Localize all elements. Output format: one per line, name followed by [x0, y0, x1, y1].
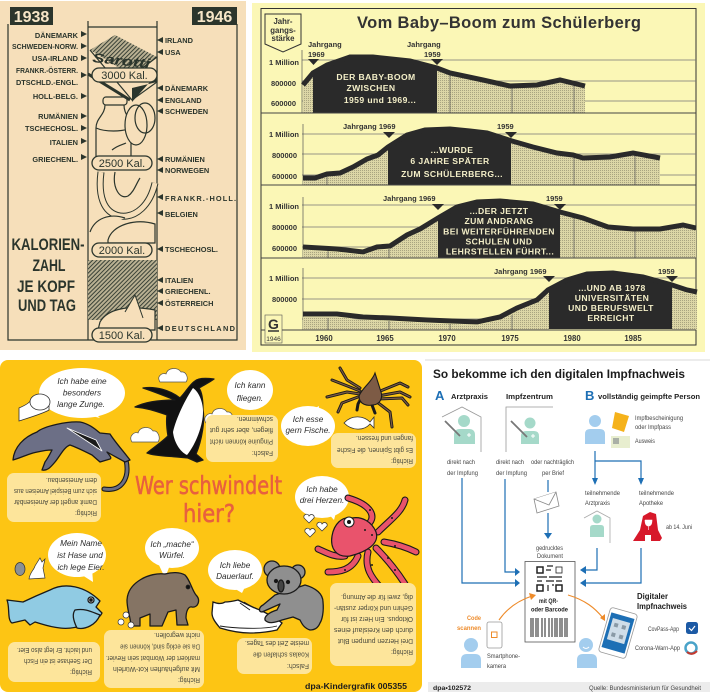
label: printed document: Dokument: [537, 553, 563, 560]
block text: BEI WEITERFÜHRENDEN: [443, 226, 555, 236]
country list 1946: USA: [165, 48, 181, 57]
answer: octopus: Drei Herzen pumpen Blut: [338, 637, 413, 644]
country list 1938: GRIECHENL.: [32, 155, 78, 164]
answer: octopus: Gehirn und Körper zustän-: [333, 604, 413, 611]
answer: anteater: Richtig:: [75, 509, 97, 516]
calorie marker 2500: [92, 156, 152, 170]
speech bubble: anteater: besonders: [63, 388, 101, 398]
answer: koala: Falsch:: [287, 662, 309, 669]
labels under A: direkt nach: [496, 459, 524, 466]
x axis years: 1960: [315, 334, 333, 343]
block text: ZWISCHEN: [346, 83, 396, 93]
marker 1969: Jahrgang 1969: [343, 122, 396, 131]
x axis years: 1970: [438, 334, 456, 343]
axis labels: [269, 130, 299, 181]
marker 1969: Jahrgang 1969: [494, 267, 547, 276]
label: smartphone camera: [487, 653, 520, 670]
marker 1969: Jahrgang 1969: [383, 194, 436, 203]
footer bar: [428, 682, 710, 692]
heading: Kalorienzahl je Kopf und Tag: [12, 235, 84, 315]
speech bubble: penguin: fliegen.: [237, 394, 263, 403]
icon: doctor in practice: [442, 407, 481, 452]
illustration: chocolate box: [88, 35, 157, 102]
logo G 1946: G: [268, 316, 279, 332]
country list 1946: SCHWEDEN: [165, 107, 208, 116]
axis labels: 1 Million: [269, 202, 299, 211]
year label 1946: 1946: [197, 9, 232, 26]
speech bubble: spider: gern Fische.: [285, 426, 331, 435]
answer: wombat: markiert der Wombat sein Revier.: [106, 654, 200, 661]
icon: smartphone: [487, 622, 502, 648]
country list 1946: DÄNEMARK: [165, 84, 209, 93]
country list 1946: DEUTSCHLAND: [165, 324, 236, 333]
marker 1959: 1959: [658, 267, 675, 276]
octopus: [318, 498, 416, 587]
axis labels: 600000: [272, 244, 297, 253]
x axis years: 1980: [563, 334, 581, 343]
icon: hearts: [304, 514, 327, 537]
year label 1938: 1938: [14, 9, 49, 26]
label: printed document: [536, 545, 564, 560]
country list 1946: ITALIEN: [165, 276, 193, 285]
label: scan code: scannen: [457, 625, 481, 632]
heading: Kalorienzahl je Kopf und Tag: KALORIEN-: [12, 235, 84, 254]
labels practice and pharmacy: Apotheke: [639, 500, 663, 507]
panel: Vom Baby-Boom zum Schülerberg: [252, 3, 705, 352]
country list 1946: GRIECHENL.: [165, 287, 211, 296]
illustration: milk bottle, eggs and sausage: [96, 97, 155, 216]
speech bubble: sea hare: Mein Name: [60, 539, 102, 548]
label: smartphone camera: kamera: [487, 663, 506, 670]
country list 1946: BELGIEN: [165, 210, 198, 219]
printed document with QR and bar code: [525, 562, 575, 642]
axis labels: 1 Million: [269, 274, 299, 283]
penguin: [135, 378, 214, 462]
x axis years: 1985: [624, 334, 642, 343]
country list 1938: SCHWEDEN-NORW.: [12, 42, 78, 51]
block text: ZUM SCHÜLERBERG...: [401, 169, 503, 179]
speech bubble: spider: [281, 406, 335, 446]
illustration: potatoes and fish: [88, 260, 157, 330]
speech bubble: anteater: Ich habe eine: [57, 377, 107, 386]
axis labels: 600000: [271, 99, 296, 108]
answer: penguin: schwimmen.: [237, 415, 273, 422]
speech bubble: penguin: [227, 370, 273, 410]
icon: pharmacy A: [633, 512, 662, 541]
calorie marker 3000: 3000 Kal.: [101, 70, 148, 82]
heading: digital certificate: Digitaler: [637, 592, 668, 601]
marker 1959: 1959: [546, 194, 563, 203]
block text: ERREICHT: [587, 313, 635, 323]
illustration: chocolate box: Sarotti: [92, 50, 151, 71]
speech bubble: octopus: drei Herzen.: [300, 496, 344, 505]
x axis years: 1965: [376, 334, 394, 343]
speech bubble: wombat: [145, 528, 199, 578]
fish: sea hare: [7, 586, 102, 628]
marker 1969: [343, 122, 396, 138]
answer: octopus: Oktopus. Ein Herz ist für: [340, 615, 413, 622]
answer: spider: Es gibt Spinnen, die Fische: [337, 446, 413, 453]
label: scan code: [457, 615, 481, 632]
section heading B: [585, 388, 700, 403]
person B: [585, 415, 605, 444]
icon: tape measure: [19, 394, 50, 421]
labels under A: per Brief: [542, 470, 564, 477]
answer: penguin: Falsch:: [252, 449, 273, 456]
heading: Kalorienzahl je Kopf und Tag: JE KOPF: [17, 277, 75, 296]
block text: ...DER JETZT: [470, 206, 529, 216]
section heading A: A: [435, 388, 445, 403]
labels practice and pharmacy: teilnehmende: [639, 490, 674, 497]
labels under A: direkt nach: [447, 459, 475, 466]
title: [135, 471, 282, 528]
title: Wer schwindelt: [135, 471, 282, 500]
axis labels: [269, 202, 299, 253]
heading: digital certificate: Impfnachweis: [637, 602, 688, 611]
answer: sea hare: Richtig:: [70, 668, 92, 675]
axis labels: 1 Million: [269, 58, 299, 67]
speech bubble: koala: Dauerlauf.: [216, 572, 254, 581]
credit: dpa-Kindergrafik 005355: [305, 681, 407, 691]
spider: [327, 368, 410, 427]
marker Jahrgang 1969: 1969: [308, 50, 325, 59]
answer: penguin: [206, 415, 278, 462]
marker Jahrgang 1969: [308, 40, 342, 65]
answer: spider: [331, 433, 416, 468]
answer: koala: Koalas schlafen die: [253, 650, 309, 658]
heading: digital certificate: [637, 592, 688, 611]
QR code: [537, 566, 562, 591]
marker 1969: [383, 194, 444, 210]
axis labels: 800000: [272, 223, 297, 232]
answer: anteater: [7, 473, 101, 522]
block text: ...WURDE: [431, 145, 473, 155]
answer: octopus: durch den Kreislauf eines: [334, 626, 413, 633]
running shoe: [212, 600, 282, 633]
marker Jahrgang 1959: 1959: [424, 50, 441, 59]
speech bubble: sea hare: ist Hase und: [57, 551, 103, 560]
chart row 1: [269, 40, 696, 113]
answer: penguin: fliegen, aber sehr gut: [210, 426, 273, 433]
answer: wombat: Mit aufgehäuften Kot-Würfeln: [113, 665, 200, 672]
answer: sea hare: Der Seehase ist ein Fisch: [24, 657, 92, 664]
bar code: [531, 618, 567, 637]
axis labels: [269, 58, 299, 108]
block text: 6 JAHRE SPÄTER: [410, 156, 490, 166]
country list 1946: NORWEGEN: [165, 166, 209, 175]
axis labels: 600000: [272, 172, 297, 181]
block text: UNIVERSITÄTEN: [575, 293, 649, 303]
country list 1946: ÖSTERREICH: [165, 299, 213, 308]
label: from 14 June: ab 14. Juni: [666, 524, 692, 531]
labels for B documents: [635, 415, 683, 445]
panel: Wer schwindelt hier?: [0, 360, 422, 692]
printed document with QR and bar code: mit QR-: [539, 598, 558, 605]
speech bubble: penguin: Ich kann: [235, 381, 266, 390]
labels under A: der Impfung: [447, 470, 478, 477]
arrows from A to document: [462, 478, 552, 587]
country list 1938: DÄNEMARK: [35, 31, 79, 40]
chart title: Vom Baby–Boom zum Schülerberg: [357, 14, 641, 32]
answer: octopus: Richtig:: [391, 648, 413, 655]
axis labels: 800000: [272, 151, 297, 160]
answer: sea hare: und laicht. Er legt also Eier.: [17, 646, 92, 653]
marker 1959: [658, 267, 678, 282]
label: scan code: Code: [467, 615, 481, 622]
icon: doctor in vaccination centre: [506, 407, 553, 452]
axis unit badge: gangs-: [270, 26, 296, 35]
calorie marker 3000: [92, 68, 157, 82]
country list 1938: HOLL-BELG.: [33, 92, 78, 101]
labels for B documents: Impfbescheinigung: [635, 415, 683, 422]
country list 1938: [12, 31, 87, 164]
block text: [336, 72, 416, 105]
country list 1946: TSCHECHOSL.: [165, 245, 218, 254]
speech bubble: octopus: Ich habe: [306, 485, 338, 494]
answer: spider: fangen und fressen.: [356, 434, 413, 441]
block text: [443, 206, 555, 256]
frame and central column: [8, 21, 237, 340]
block text: UND BERUFSWELT: [568, 303, 654, 313]
arrows to document from the right: [580, 548, 641, 587]
marker Jahrgang 1969: Jahrgang: [308, 40, 342, 49]
axis unit badge: [265, 14, 301, 52]
panel: digitaler Impfnachweis: [425, 359, 710, 693]
labels under A: [447, 459, 574, 477]
chart row 4: [269, 267, 697, 330]
marker Jahrgang 1959: Jahrgang: [407, 40, 441, 49]
calorie marker 2500: 2500 Kal.: [99, 158, 145, 170]
country list 1938: FRANKR.-ÖSTERR.: [16, 66, 78, 75]
answer: sea hare: [8, 642, 100, 682]
axis labels: 800000: [271, 79, 296, 88]
calorie marker 2000: 2000 Kal.: [99, 245, 145, 257]
title: So bekomme ich den digitalen Impfnachweis: [433, 367, 685, 381]
CovPass app: [648, 622, 698, 634]
country list 1938: DTSCHLD.-ENGL.: [16, 78, 78, 87]
koala: [259, 561, 323, 630]
title: hier?: [183, 499, 235, 528]
answer: wombat: nicht wegrollen.: [154, 631, 200, 638]
country list 1938: ITALIEN: [50, 138, 78, 147]
answer: anteater: sich zum Beispiel Ameisen aus: [14, 487, 97, 494]
calorie marker 1500: 1500 Kal.: [99, 330, 145, 342]
marker 1959: [546, 194, 566, 210]
axis labels: 800000: [272, 295, 297, 304]
icon: ID card: [611, 436, 630, 448]
CovPass app: CovPass-App: [648, 626, 679, 633]
labels under A: der Impfung: [496, 470, 527, 477]
label: smartphone camera: Smartphone-: [487, 653, 520, 660]
wombat: [127, 573, 199, 626]
speech bubble: wombat: Würfel.: [159, 551, 185, 560]
labels for B documents: oder Impfpass: [635, 424, 672, 431]
country list 1938: USA-IRLAND: [32, 54, 79, 63]
axis unit badge: stärke: [272, 34, 295, 43]
labels practice and pharmacy: teilnehmende: [585, 490, 620, 497]
marker 1959: 1959: [497, 122, 514, 131]
country list 1946: FRANKR.-HOLL.: [165, 194, 236, 203]
answer: penguin: Pinguine können nicht: [210, 438, 273, 444]
labels practice and pharmacy: Arztpraxis: [585, 500, 611, 507]
phone with digital certificate: [598, 607, 638, 659]
speech bubble: sea hare: [48, 533, 106, 582]
section heading B: vollständig geimpfte Person: [598, 392, 700, 401]
answer: wombat: Richtig:: [178, 676, 200, 683]
icon: white fish: [344, 417, 374, 429]
section heading A: Impfzentrum: [506, 392, 553, 401]
calorie marker 2000: [92, 243, 152, 257]
Corona-Warn app: Corona-Warn-App: [635, 645, 680, 652]
arrows from B to practice and pharmacy: [592, 451, 644, 485]
Corona-Warn app: [635, 642, 697, 654]
answer: spider: Richtig:: [391, 457, 413, 464]
person scanning: [461, 638, 481, 668]
speech bubble: koala: [208, 550, 262, 593]
marker 1969: [494, 267, 555, 282]
answer: anteater: dem Ameisenbau.: [46, 476, 97, 483]
block text: [401, 145, 503, 179]
icon: wombat cube droppings: [118, 612, 134, 628]
footer bar: Quelle: Bundesministerium für Gesundheit: [589, 685, 701, 692]
chart row 3: [269, 194, 696, 258]
heading: Kalorienzahl je Kopf und Tag: ZAHL: [32, 256, 66, 275]
speech bubble: sea hare: ich lege Eier.: [57, 563, 105, 572]
answer: octopus: [330, 583, 416, 666]
country list 1946: RUMÄNIEN: [165, 155, 205, 164]
marker Jahrgang 1959: [407, 40, 443, 65]
illustration: bread: [90, 216, 155, 243]
block text: DER BABY-BOOM: [336, 72, 416, 82]
labels for B documents: Ausweis: [635, 438, 656, 445]
answer: octopus: dig, zwei für die Atmung.: [341, 593, 413, 600]
clouds: [131, 368, 233, 442]
printed document with QR and bar code: oder Barcode: [531, 606, 568, 614]
answer: koala: meiste Zeit des Tages.: [245, 639, 309, 646]
country list 1946: IRLAND: [165, 36, 194, 45]
axis labels: 1 Million: [269, 130, 299, 139]
section heading B: B: [585, 388, 594, 403]
block text: ZUM ANDRANG: [464, 216, 534, 226]
person with app: [577, 638, 597, 668]
axis labels: [269, 274, 299, 304]
labels under A: oder nachträglich: [531, 459, 574, 466]
logo G 1946: [265, 315, 282, 343]
answer: wombat: Da sie eckig sind, können sie: [120, 642, 200, 650]
speech bubble: koala: Ich liebe: [220, 561, 251, 570]
block text: [568, 283, 654, 323]
icon: egg and bunny: [15, 558, 45, 579]
chart row 2: [269, 122, 696, 185]
icon: small practice: [584, 511, 610, 543]
country list 1938: RUMÄNIEN: [38, 112, 78, 121]
labels practice and pharmacy: [585, 490, 674, 507]
logo G 1946: 1946: [266, 336, 281, 343]
x axis years: [315, 334, 642, 343]
speech bubble: octopus: [295, 476, 349, 520]
footer bar: dpa•102572: [433, 685, 471, 692]
block text: ...UND AB 1978: [578, 283, 646, 293]
speech bubble: spider: Ich esse: [293, 415, 324, 424]
answer: wombat: [104, 630, 204, 688]
heading: Kalorienzahl je Kopf und Tag: UND TAG: [18, 296, 76, 315]
speech bubble: anteater: [39, 368, 125, 418]
calorie marker 1500: [92, 328, 152, 342]
icon: envelope: [534, 492, 559, 513]
answer: koala: [237, 638, 312, 674]
block text: 1959 und 1969...: [344, 95, 416, 105]
section heading A: [435, 388, 553, 403]
block text: LEHRSTELLEN FÜHRT...: [446, 246, 554, 256]
marker 1959: [497, 122, 517, 138]
country list 1938: TSCHECHOSL.: [25, 124, 78, 133]
country list 1946: [157, 36, 236, 333]
speech bubble: anteater: lange Zunge.: [57, 400, 105, 409]
section heading A: Arztpraxis: [451, 392, 488, 401]
block text: SCHULEN UND: [466, 236, 532, 246]
panel: Kalorienzahl 1938 und 1946: [0, 1, 246, 350]
icon: vaccination certificate: [612, 412, 629, 432]
x axis years: 1975: [501, 334, 519, 343]
axis unit badge: Jahr-: [273, 17, 293, 26]
label: printed document: gedrucktes: [536, 545, 564, 552]
arrows scanning: [499, 593, 605, 621]
speech bubble: wombat: Ich „mache“: [150, 540, 195, 549]
anteater: [13, 422, 130, 489]
answer: anteater: Damit angelt der Ameisenbär: [13, 498, 97, 505]
country list 1946: ENGLAND: [165, 96, 202, 105]
